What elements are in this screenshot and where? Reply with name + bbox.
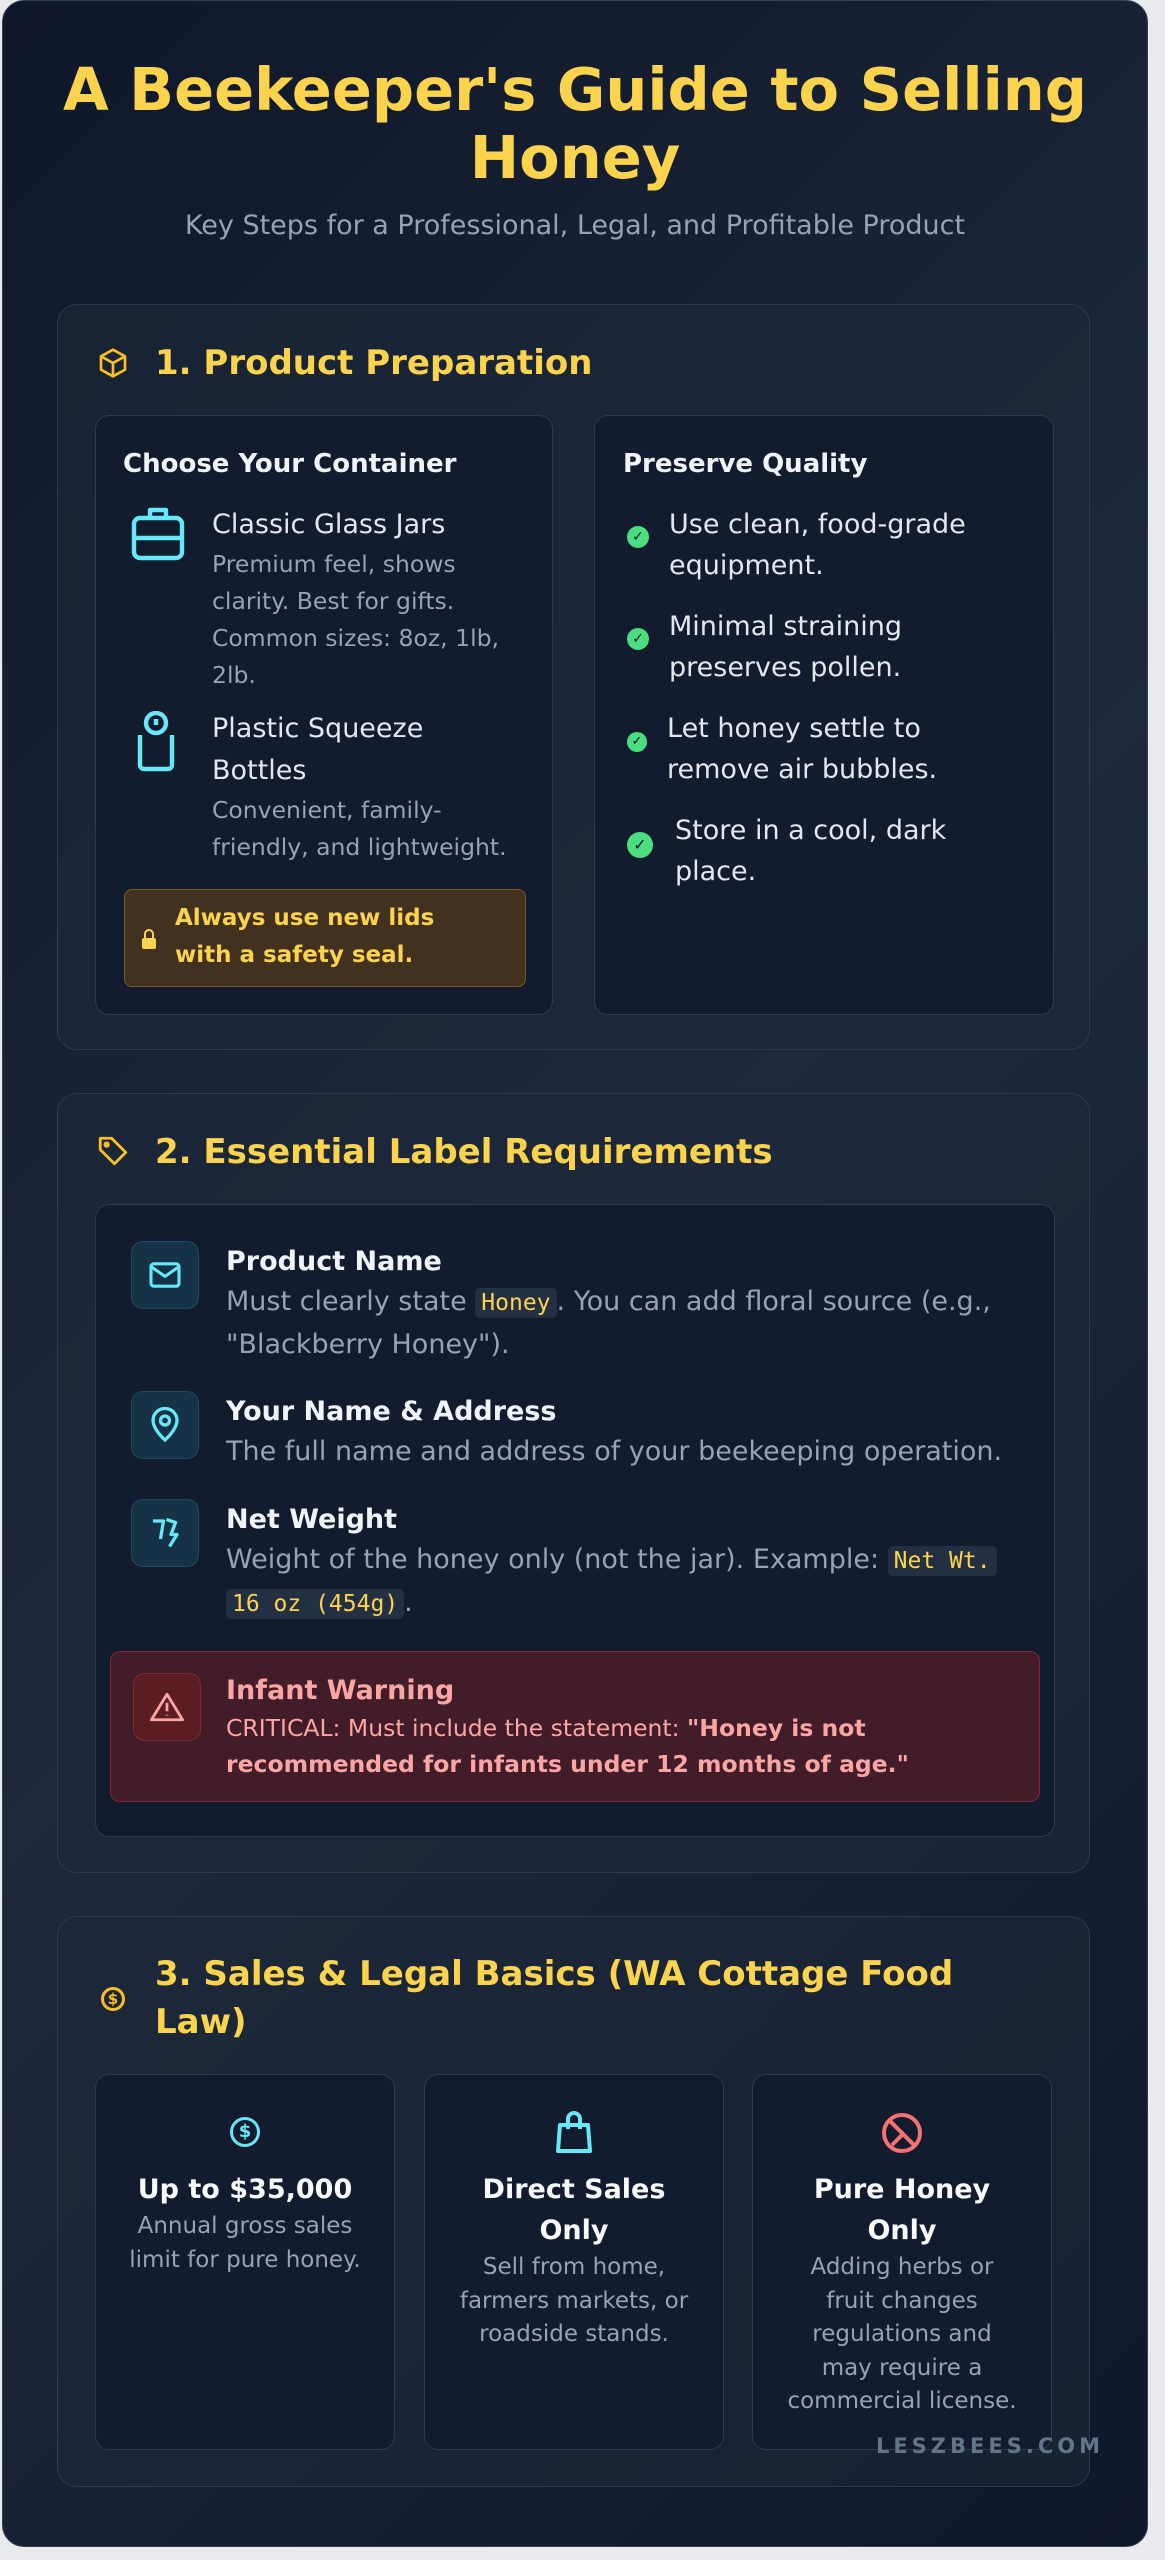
panel: sales and legal — [57, 1916, 1090, 2487]
list: quality tips: ✓ — [633, 835, 647, 854]
panel: product preparation — [57, 304, 1090, 1050]
item: name and address: Your Name & Address — [226, 1396, 556, 1427]
icon: tag — [98, 1136, 128, 1166]
icon: jar — [132, 508, 184, 560]
callout: infant warning: CRITICAL: Must include the statement: "Honey is not recommended for infants under 12 months of age." — [226, 1714, 909, 1778]
card: pure honey: Pure Honey — [814, 2174, 990, 2205]
sub-panel: label list — [95, 1204, 1055, 1837]
card: sales limit: Annual gross sales limit for pure honey. — [129, 2213, 361, 2272]
callout: safety seal: with a safety seal. — [175, 942, 413, 968]
item: glass jars: Premium feel, shows clarity. Best for gifts. Common sizes: 8oz, 1lb, 2lb. — [212, 550, 499, 689]
item: net weight — [131, 1499, 997, 1619]
icon: squeeze bottle — [138, 711, 174, 772]
icon: shopping bag — [556, 2111, 592, 2153]
card: pure honey: Adding herbs or fruit changes regulations and may require a commercial license. — [787, 2254, 1017, 2414]
icon: location pin — [131, 1391, 199, 1459]
callout: safety seal: Always use new lids — [175, 905, 434, 931]
card: direct sales: Sell from home, farmers markets, or roadside stands. — [460, 2254, 688, 2347]
list: quality tips: Use clean, food-grade equipment. — [669, 509, 966, 581]
footer: brand: LESZBEES.COM — [876, 2434, 1104, 2458]
item: name and address: The full name and address of your beekeeping operation. — [226, 1436, 1002, 1467]
list: quality tips: ✓ — [632, 529, 644, 545]
card: pure honey: Only — [867, 2215, 937, 2246]
item: net weight: 16 oz (454g). — [232, 1587, 413, 1618]
item: glass jars: Classic Glass Jars — [212, 509, 445, 540]
list: quality tips: ✓ — [632, 734, 642, 749]
icon: dollar coin: $ — [108, 1990, 118, 2008]
icon: scale — [131, 1499, 199, 1567]
card: pure honey — [752, 2074, 1052, 2450]
heading: sales and legal: 3. Sales & Legal Basics (WA Cottage Food Law) — [155, 1954, 953, 2042]
sub-panel: choose your container — [95, 415, 553, 1015]
card: direct sales: Direct Sales — [483, 2174, 665, 2205]
item: product name — [131, 1241, 991, 1360]
icon: lock — [142, 929, 156, 949]
heading: product preparation: 1. Product Preparation — [155, 343, 592, 383]
heading: choose container: Choose Your Container — [123, 449, 456, 479]
list: quality tips: Minimal straining preserves pollen. — [669, 611, 902, 683]
list: quality tips: Let honey settle to remove air bubbles. — [667, 713, 937, 785]
item: squeeze bottles — [212, 713, 507, 861]
callout: safety seal — [124, 889, 526, 987]
card: direct sales — [424, 2074, 724, 2450]
item: squeeze bottles: Convenient, family-friendly, and lightweight. — [212, 796, 507, 861]
card: direct sales: Only — [539, 2215, 609, 2246]
icon: dollar: $ — [239, 2121, 251, 2142]
icon: box — [100, 348, 126, 378]
item: product name: Must clearly state Honey. You can add floral source (e.g., "Blackberry Honey"). — [226, 1286, 991, 1360]
title: A Beekeeper's Guide to Selling Honey — [63, 55, 1087, 192]
heading: label requirements: 2. Essential Label Requirements — [155, 1132, 773, 1172]
heading: preserve quality: Preserve Quality — [623, 449, 867, 479]
item: squeeze bottles: Plastic Squeeze Bottles — [212, 713, 423, 786]
icon: envelope — [131, 1241, 199, 1309]
panel: label requirements — [57, 1093, 1090, 1873]
item: name and address — [131, 1391, 1002, 1467]
icon: dollar coin — [101, 1987, 125, 2011]
callout: infant warning: Infant Warning — [226, 1675, 454, 1706]
item: net weight: Weight of the honey only (not the jar). Example: Net Wt. — [226, 1544, 991, 1575]
icon: prohibited — [882, 2113, 922, 2153]
subtitle: Key Steps for a Professional, Legal, and Profitable Product — [185, 210, 965, 241]
icon: dollar — [230, 2117, 260, 2147]
card: sales limit — [95, 2074, 395, 2450]
list: quality tips: Store in a cool, dark place. — [675, 815, 946, 887]
icon: warning triangle — [133, 1673, 201, 1741]
sub-panel: preserve quality — [594, 415, 1054, 1015]
list: quality tips: ✓ — [632, 631, 644, 647]
list: quality tips — [627, 509, 966, 887]
callout: infant warning — [110, 1651, 1040, 1802]
item: product name: Product Name — [226, 1246, 442, 1277]
item: net weight: Net Weight — [226, 1504, 397, 1535]
card: sales limit: Up to $35,000 — [138, 2174, 352, 2205]
